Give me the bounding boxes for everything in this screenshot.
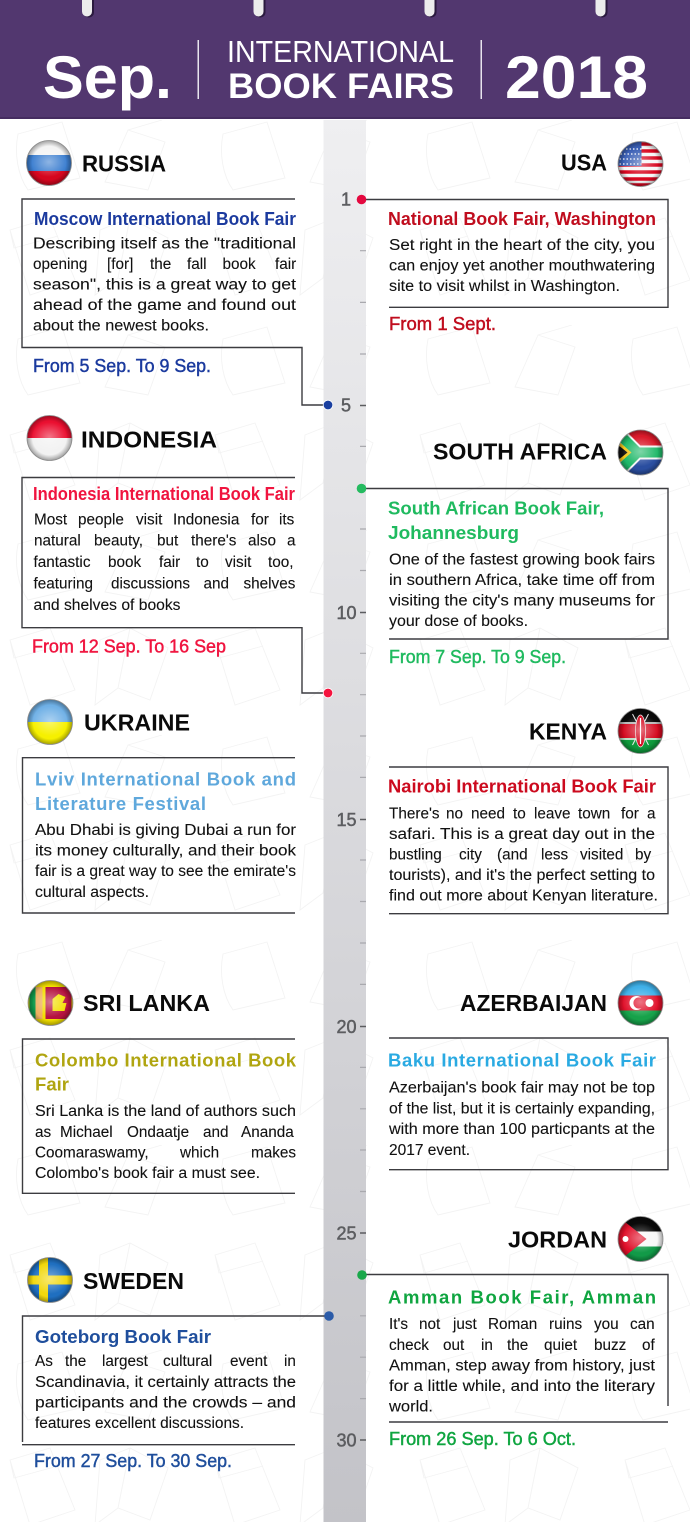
description: and shelves of books	[34, 597, 181, 614]
description: ahead of the game and found out	[33, 297, 297, 314]
description: fair is a great way to see the emirate's	[35, 863, 296, 880]
description: a	[647, 805, 656, 822]
description: not	[419, 1316, 441, 1333]
timeline dot	[323, 400, 333, 410]
description: in southern Africa, take time off from	[389, 572, 655, 589]
description: of the list, but it is certainly expanding,	[389, 1100, 655, 1118]
panel: Sri Lanka	[22, 980, 297, 1193]
fair title	[35, 1050, 297, 1095]
description: can enjoy yet another mouthwatering	[389, 258, 655, 274]
panel: Russia	[22, 140, 333, 410]
description	[388, 1080, 655, 1159]
timeline dot	[323, 688, 333, 698]
icon: South Africa flag	[616, 430, 664, 476]
description: Describing itself as the "traditional	[33, 236, 296, 252]
box and connector	[22, 199, 326, 405]
description	[35, 1353, 296, 1432]
icon: Ukraine flag	[27, 699, 73, 745]
day numbers: 1	[341, 190, 351, 210]
description: there's	[191, 532, 237, 550]
icon: Sri Lanka flag	[28, 980, 74, 1026]
description: city	[459, 846, 482, 864]
fair title: Lviv International Book and	[35, 769, 296, 790]
fair title: Fair	[35, 1074, 69, 1095]
description: season", this is a great way to get	[33, 276, 297, 294]
panel: Kenya	[388, 708, 668, 914]
timeline dot	[357, 484, 366, 493]
year: 2018	[505, 44, 648, 111]
description: opening	[33, 256, 87, 273]
icon: Azerbaijan flag	[618, 980, 664, 1026]
description: its money culturally, and their book	[35, 842, 296, 860]
day numbers: 10	[336, 603, 357, 623]
box	[22, 758, 295, 913]
dates: From 5 Sep. To 9 Sep.	[33, 355, 211, 376]
description	[34, 512, 296, 614]
icon: Sweden flag	[27, 1257, 73, 1303]
panel: Ukraine	[22, 699, 296, 913]
fair title: Colombo International Book	[35, 1050, 297, 1071]
description: which	[179, 1144, 219, 1162]
heading: Russia: RUSSIA	[82, 150, 166, 176]
heading: Ukraine: UKRAINE	[84, 710, 190, 736]
title: BOOK FAIRS	[228, 67, 454, 106]
header band	[0, 0, 690, 119]
description: no	[446, 805, 463, 822]
description: [for]	[107, 256, 133, 273]
description: event	[230, 1353, 268, 1370]
description: Michael	[60, 1124, 113, 1141]
description: Sri Lanka is the land of authors such	[35, 1103, 296, 1120]
description: your dose of books.	[389, 613, 528, 630]
dates: From 12 Sep. To 16 Sep	[32, 636, 226, 657]
description: in	[284, 1353, 296, 1370]
description: Colombo's book fair a must see.	[35, 1165, 260, 1182]
description	[35, 822, 296, 901]
description: Abu Dhabi is giving Dubai a run for	[35, 822, 296, 839]
description: for	[251, 512, 269, 528]
day numbers: 20	[336, 1017, 357, 1037]
heading: Sweden: SWEDEN	[83, 1268, 184, 1294]
dates: From 1 Sept.	[389, 313, 496, 334]
description	[33, 236, 297, 334]
description: One of the fastest growing book fairs	[389, 551, 655, 568]
description: features excellent discussions.	[35, 1415, 244, 1432]
description: find out more about Kenyan literature.	[389, 888, 658, 905]
description	[35, 1103, 296, 1182]
panel: Indonesia	[22, 415, 333, 698]
heading: USA: USA	[561, 150, 607, 176]
timeline spine	[324, 120, 366, 1522]
description: about the newest books.	[33, 318, 209, 334]
dates: From 7 Sep. To 9 Sep.	[389, 646, 566, 667]
description: buzz	[594, 1337, 626, 1354]
description: (and	[497, 846, 528, 864]
description: Most	[34, 512, 68, 528]
icon: Indonesia flag	[26, 415, 72, 461]
description: fantastic	[34, 554, 91, 571]
description: shelves	[244, 576, 296, 592]
description: ruins	[549, 1316, 583, 1333]
icon: Kenya flag	[618, 708, 664, 754]
panel: Azerbaijan	[388, 980, 668, 1170]
description: site to visit whilst in Washington.	[389, 278, 620, 295]
description: natural	[34, 532, 81, 550]
description: check	[389, 1337, 429, 1354]
description: can	[630, 1316, 655, 1333]
box and connector	[364, 200, 668, 307]
description: to	[513, 805, 526, 822]
box and connector	[22, 478, 326, 693]
description: bustling	[389, 846, 442, 864]
panel: USA	[357, 141, 668, 334]
description: visit	[136, 512, 163, 528]
description	[389, 805, 658, 905]
description	[388, 1316, 656, 1416]
timeline dot	[357, 195, 366, 204]
day numbers: 30	[336, 1430, 357, 1450]
description: for a little while, and into the literary	[389, 1378, 655, 1395]
fair title: Goteborg Book Fair	[35, 1326, 211, 1347]
description: book	[108, 554, 142, 571]
dates: From 27 Sep. To 30 Sep.	[34, 1450, 232, 1471]
description: for	[621, 805, 639, 822]
day numbers: 5	[341, 396, 351, 416]
description: discussions	[111, 576, 190, 592]
day numbers	[336, 190, 357, 1450]
description	[389, 237, 655, 295]
fair title: Nairobi International Book Fair	[388, 775, 656, 796]
description: Roman	[488, 1316, 537, 1333]
description: 2017 event.	[389, 1142, 470, 1159]
description: participants and the crowds – and	[35, 1394, 296, 1412]
description: largest	[102, 1353, 149, 1370]
fair title: South African Book Fair,	[388, 497, 604, 518]
description: to	[196, 554, 209, 571]
icon: Russia flag	[26, 140, 72, 186]
description: the	[150, 256, 171, 273]
description: Indonesia	[173, 512, 240, 528]
fair title: Literature Festival	[35, 793, 206, 814]
icon: USA flag	[618, 141, 664, 187]
description: people	[78, 512, 124, 528]
timeline dot	[324, 1311, 334, 1321]
panel: South Africa	[357, 430, 668, 667]
description: Ondaatje	[127, 1124, 189, 1141]
description: of	[642, 1337, 656, 1354]
description: but	[157, 532, 179, 550]
description: visiting the city's many museums for	[389, 592, 655, 610]
fair title: Indonesia International Book Fair	[33, 483, 295, 504]
description: cultural aspects.	[35, 884, 149, 901]
description: Amman, step away from history, just	[389, 1358, 656, 1374]
description: you	[594, 1316, 619, 1333]
description: the	[507, 1337, 528, 1354]
fair title	[35, 769, 296, 814]
description: a	[287, 532, 296, 550]
box	[389, 1038, 668, 1170]
fair title: Amman Book Fair, Amman	[388, 1287, 656, 1308]
description: town	[578, 805, 610, 822]
description: fair	[275, 256, 296, 273]
panel: Jordan	[357, 1216, 668, 1449]
description: Ananda	[241, 1124, 294, 1141]
description: visited	[580, 846, 623, 864]
day numbers: 15	[336, 810, 357, 830]
description: There's	[389, 805, 440, 822]
dates: From 26 Sep. To 6 Oct.	[389, 1428, 576, 1449]
description: and	[203, 1124, 229, 1141]
heading: South Africa: SOUTH AFRICA	[433, 438, 607, 464]
day numbers: 25	[336, 1224, 357, 1244]
description: makes	[251, 1144, 296, 1162]
panel: Sweden	[22, 1257, 334, 1471]
heading: Sri Lanka: SRI LANKA	[83, 990, 210, 1016]
description: Scandinavia, it certainly attracts the	[35, 1374, 296, 1391]
description: As	[35, 1353, 53, 1370]
description: featuring	[34, 576, 93, 592]
description: Azerbaijan's book fair may not be top	[389, 1080, 655, 1097]
description: need	[471, 805, 505, 822]
description: the	[65, 1353, 86, 1370]
fair title: Baku International Book Fair	[388, 1050, 656, 1071]
description: Coomaraswamy,	[35, 1144, 149, 1162]
description	[389, 551, 655, 630]
fair title: National Book Fair, Washington	[388, 208, 656, 229]
description: quiet	[544, 1337, 578, 1354]
description: It's	[389, 1316, 408, 1333]
heading: Azerbaijan: AZERBAIJAN	[460, 990, 607, 1016]
description: safari. This is a great day out in the	[389, 826, 655, 843]
description: too,	[268, 554, 294, 571]
heading: Jordan: JORDAN	[508, 1226, 607, 1252]
description: by	[635, 846, 652, 864]
heading: Indonesia: INDONESIA	[81, 426, 217, 452]
box and connector	[22, 1316, 327, 1445]
icon: Jordan flag	[618, 1216, 664, 1262]
description: cultural	[163, 1353, 212, 1370]
box and connector	[364, 488, 668, 639]
description: leave	[534, 805, 571, 822]
description: book	[222, 256, 256, 273]
description: with more than 100 particpants at the	[388, 1121, 655, 1138]
description: beauty,	[94, 532, 143, 550]
description: tourists), and it's the perfect setting to	[389, 867, 655, 884]
description: fall	[187, 256, 207, 273]
description: less	[541, 846, 569, 864]
box	[389, 767, 668, 914]
description: just	[452, 1316, 478, 1333]
description: and	[204, 576, 229, 592]
description: Set right in the heart of the city, you	[389, 237, 655, 254]
description: as	[35, 1124, 52, 1141]
fair title: Johannesburg	[388, 522, 519, 543]
box	[22, 1039, 295, 1193]
fair title: Moscow International Book Fair	[34, 208, 296, 229]
description: also	[248, 532, 276, 550]
description: visit	[225, 554, 252, 571]
description: out	[443, 1337, 465, 1354]
description: its	[279, 512, 295, 528]
fair title	[388, 497, 604, 543]
title	[227, 34, 454, 106]
description: world.	[388, 1398, 433, 1416]
month: Sep.	[43, 44, 172, 111]
title: INTERNATIONAL	[227, 34, 454, 69]
heading: Kenya: KENYA	[529, 718, 607, 744]
timeline dot	[357, 1270, 367, 1280]
description: in	[481, 1337, 493, 1354]
binder rings	[82, 0, 608, 18]
box and connector	[364, 1274, 668, 1422]
description: fair	[159, 554, 180, 571]
